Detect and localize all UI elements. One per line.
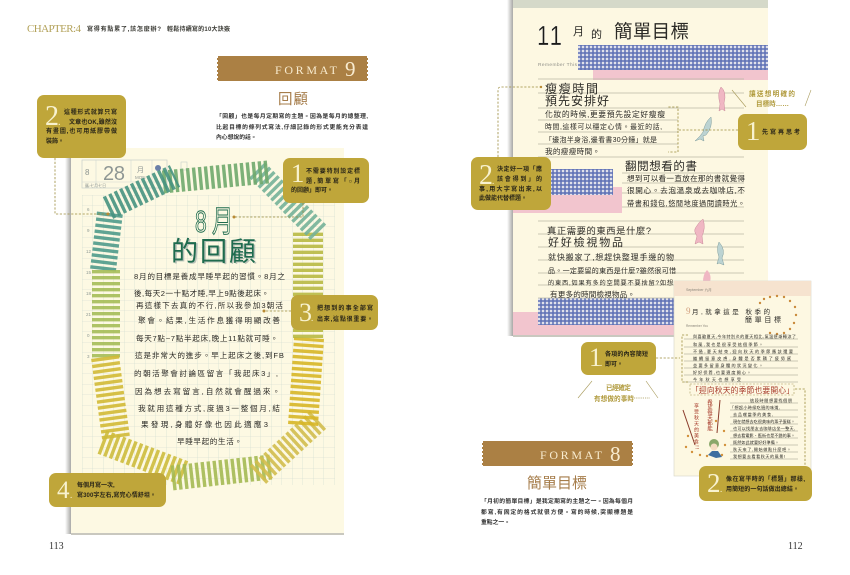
handwritten text: august review body: 果發現,身體好像也因此適應3: [141, 419, 268, 429]
handwritten section: books: 帶書和錢包,悠閒地度過閱讀時光。: [627, 199, 745, 208]
handwritten text: august review body: 8月的目標是養成早睡早起的習慣。8月之: [134, 271, 285, 281]
handwritten section: books: 翻閱想看的書: [625, 159, 697, 173]
chapter header: [27, 23, 230, 35]
intro text: review: 「回顧」也是每月定期寫的主題。因為是每月的總整理,: [216, 112, 368, 120]
heading: review: 回顧: [278, 91, 308, 108]
handwritten section: slimming time: 我的瘦瘦時間。: [545, 146, 600, 156]
note body: 不過,夏天結束,迎向秋天的季節應該還要: [693, 348, 793, 354]
callout 2: left page: 有畫圖,也可用紙膠帶做: [46, 127, 117, 135]
note second body: [730, 397, 798, 459]
hour scale: 18: [86, 291, 92, 296]
callout 1: right top: [738, 114, 807, 150]
note body: 並要多留意身體的狀況變化。: [693, 362, 763, 368]
hour scale: [86, 207, 92, 359]
ruled lines: [538, 79, 744, 298]
hour scale: 3: [87, 354, 90, 359]
callout 1: left page: 題,簡單寫「○月: [306, 177, 360, 185]
callout 3: left page: 出來,這點很重要。: [317, 315, 373, 323]
handwritten section: things: 的東西,如果有多的空間要不要捨留?如想: [548, 279, 673, 287]
callout 1: center: 即可。: [605, 361, 623, 368]
callout 2: right left: 決定好一項「應: [497, 165, 542, 173]
callout 1: right top: .: [757, 132, 759, 142]
intro text: review: [216, 112, 368, 141]
handwritten text: august review body: 後,每天2一十點才睡,早上9點後起床。: [134, 288, 269, 298]
side note: when setting a clear goal: 目標時……: [756, 99, 789, 108]
callout 2: right left: 該會得到」的: [497, 175, 542, 183]
red heading in note: 「迎向秋天的季節也要開心」: [691, 385, 794, 395]
note body: 今年秋天也想享受: [693, 376, 741, 382]
small note: september goals: [674, 281, 811, 476]
handwritten text: august review body: 這是非常大的進步。早上起床之後,到FB: [135, 350, 284, 360]
handwritten text: august review body: 早睡早起的生活。: [177, 436, 242, 446]
note body: 與喜歡夏天,今年特別炎的夏天相比,氣溫逐漸轉涼了: [693, 333, 796, 339]
icon: fish: [695, 87, 725, 282]
note second body: 也可以找朋友去咖啡店坐一整天,: [733, 425, 795, 431]
handwritten section: things: [547, 225, 676, 299]
date header box: 8: [85, 168, 90, 177]
small note: september goals: September 九月: [686, 287, 712, 292]
handwritten section: books: 想到可以看一直放在那的書就覺得: [627, 173, 745, 183]
banner: format 9: FORMAT: [275, 63, 340, 77]
date header box: 舊:七月七日: [85, 182, 106, 188]
handwritten text: august review body: 再這樣下去真的不行,所以我參加3朝活: [136, 300, 283, 310]
callout 3: left page: [291, 295, 378, 330]
note second body: 我想要去看看秋天的風景!: [733, 453, 785, 459]
handwritten section: slimming time: 時間,這樣可以穩定心情。最近的話,: [545, 122, 662, 131]
chapter header: 輕鬆持續寫的10大訣竅: [167, 25, 230, 33]
handwritten text: august review body: 我就用這種方式,度過3一整個月,結: [138, 403, 280, 413]
callout 2: right left: .: [492, 176, 494, 186]
connector: callout 1 to body bracket: [668, 107, 738, 152]
note second body: 去品嚐當季的美食,: [733, 411, 773, 417]
callout 2: bottom right: 像在寫平時的「標題」那樣,: [726, 475, 805, 483]
connector: callout 2 to heading: [498, 86, 542, 157]
intro text: simple goals: 都寫,有固定的格式就很方便。寫的時候,突顯標題是: [481, 508, 633, 516]
intro text: review: 比起目標的條列式寫法,仔細記錄的形式更能充分表達: [216, 123, 368, 131]
note body: 好好保養,也要適度開心。: [693, 369, 751, 375]
callout 1: right top: 先寫再思考: [762, 128, 800, 136]
handwritten title: november goals: 月: [573, 26, 584, 38]
callout 1: center: 各項的內容簡短: [605, 350, 648, 358]
note second body: 這段時間想要找個朋: [750, 397, 792, 403]
side note: when setting a clear goal: [732, 89, 811, 108]
hour scale: 0: [87, 333, 90, 338]
handwritten section: books: [625, 159, 745, 208]
panel: notebook page august review: [65, 148, 344, 535]
note body: [682, 333, 798, 382]
intro text: simple goals: 「月初的簡單目標」是我定期寫的主題之一。因為每個月: [481, 497, 633, 505]
hour scale: 6: [87, 207, 90, 212]
handwritten title: august review: [171, 204, 258, 268]
handwritten section: things: 真正需要的東西是什麼?: [547, 225, 651, 236]
handwritten text: august review body: 聚會。結果,生活作息獲得明顯改善: [138, 315, 280, 325]
handwritten section: slimming time: 預先安排好: [545, 93, 609, 108]
connector: callout 2 to tape: [55, 158, 110, 216]
date header box: 28: [103, 163, 125, 185]
side note: already decided: 有想做的事時: [594, 394, 634, 403]
dotted sun circle: [759, 295, 797, 335]
callout 2: right left: [471, 157, 551, 210]
washi tape ring: [102, 170, 320, 478]
intro text: simple goals: 重點之一。: [481, 518, 510, 526]
handwritten title: november goals: [537, 21, 689, 68]
callout 1: left page: 不需要特別設定標: [306, 167, 360, 175]
note title: Remember You: [686, 324, 708, 328]
callout 2: left page: .: [58, 117, 60, 128]
callout 1: center: 1: [589, 343, 602, 372]
callout 2: left page: 2: [45, 101, 59, 132]
callout 1: center: [581, 342, 656, 375]
hour scale: 12: [86, 249, 92, 254]
handwritten title: august review: 的回顧: [171, 237, 256, 267]
callout 1: left page: 1: [291, 159, 304, 188]
handwritten title: november goals: 的: [591, 27, 602, 41]
callout 2: bottom right: 用簡短的一句話做出總結。: [726, 485, 799, 493]
callout 2: left page: 這種形式就算只寫: [64, 108, 117, 116]
callout 2: right left: 事,用大字寫出來,以: [479, 185, 542, 193]
chapter header: 寫得有點累了,該怎麼辦?: [87, 25, 161, 33]
page number 112: 112: [788, 541, 803, 552]
side note: when setting a clear goal: 讓送想明確的: [749, 89, 795, 98]
banner: format 8: 8: [610, 442, 620, 466]
page number 113: 113: [49, 541, 64, 552]
banner: format 9: [217, 56, 368, 81]
callout 2: bottom right: 2: [707, 468, 720, 498]
handwritten text: august review body: 的朝活聚會討論區留言「我起床3」,: [134, 368, 278, 378]
intro text: simple goals: [481, 497, 633, 526]
intro text: review: 內心想說的話。: [216, 133, 257, 141]
callout 2: left page: [37, 95, 126, 158]
callout 3: left page: .: [311, 313, 313, 323]
connector: callout 1 to title: [232, 203, 303, 218]
side note: already decided: 已經確定: [606, 383, 631, 392]
callout 3: left page: 3: [299, 298, 312, 327]
hour scale: 9: [87, 228, 90, 233]
handwritten text: august review body: 每天7點~7點半起床,晚上11點就可睡。: [136, 333, 278, 343]
callout 1: left page: 的回顧」即可。: [291, 186, 333, 194]
panel: notebook page november goals: [507, 0, 768, 337]
connector: callout 2 to red heading: [795, 389, 805, 466]
note second body: 既然如此就要好好準備。: [733, 439, 779, 445]
red vertical text and character: [683, 398, 726, 458]
handwritten section: slimming time: 「邊泡半身浴,邊看書30分鐘」就是: [545, 135, 657, 144]
note title: 月,就拿這是 秋季的: [692, 307, 770, 316]
red vertical text and character: 享受秋天的美食!!: [693, 402, 699, 449]
connector: callout 3 to body: [262, 310, 291, 312]
handwritten section: things: 就快搬家了,想趕快整理手邊的物: [548, 252, 674, 262]
hour scale: 21: [86, 312, 92, 317]
handwritten section: things: 好好檢視物品: [548, 235, 623, 249]
callout 1: left page: [283, 158, 369, 203]
callout 2: right left: 此做能代替標題。: [479, 194, 527, 202]
date header box: [82, 160, 187, 188]
note body: 和風,我也是很享受這個季節。: [693, 341, 763, 347]
callout 4: left page: 4: [57, 477, 70, 504]
callout 1: left page: .: [301, 174, 303, 184]
banner: format 9: 9: [345, 57, 356, 81]
callout 2: right left: 2: [479, 160, 493, 191]
handwritten section: books: 很開心。去泡溫泉或去咖啡店,不: [627, 185, 745, 195]
note second body: 現在就想去吃很美味的栗子蛋糕。: [733, 418, 795, 424]
handwritten title: november goals: 簡單目標: [614, 21, 689, 42]
chapter header: CHAPTER:4: [27, 23, 82, 35]
handwritten title: august review: 的回顧: [172, 238, 258, 268]
date header box: 月: [137, 166, 144, 174]
side note: already decided: [578, 381, 658, 403]
note second body: 秋天來了,開始做點什麼吧。: [733, 446, 791, 452]
handwritten section: things: 品。一定要留的東西是什麼?雖然很可惜: [548, 266, 676, 275]
handwritten section: slimming time: 瘦瘦時間: [545, 81, 598, 96]
callout 2: left page: 裝飾。: [46, 137, 64, 145]
callout 3: left page: 把想到的事全部寫: [317, 304, 373, 312]
callout 4: left page: 每個月寫一次,: [77, 481, 115, 489]
callout 2: left page: 文章也OK,雖然沒: [69, 118, 117, 126]
handwritten section: slimming time: 化妝的時候,更要預先設定好瘦瘦: [545, 109, 665, 119]
handwritten text: august review body: 因為想去寫留言,自然就會醒過來。: [135, 386, 280, 396]
note title: 簡單目標: [745, 315, 781, 324]
handwritten title: august review: 8月: [195, 204, 233, 239]
handwritten text: august review body: [134, 271, 285, 446]
banner: format 8: [482, 441, 633, 466]
heading: simple goals: 簡單目標: [527, 474, 587, 492]
pink and blue gingham tapes: [513, 45, 768, 335]
callout 1: right top: 1: [746, 116, 760, 146]
callout 2: bottom right: [699, 466, 812, 501]
hour scale: 15: [86, 270, 92, 275]
handwritten title: november goals: 11: [537, 21, 562, 52]
handwritten section: things: 有更多的時間檢視物品。: [550, 289, 635, 299]
note second body: 想去看電影、逛街也是不錯的事。: [733, 432, 795, 438]
callout 4: left page: [49, 473, 166, 507]
callout 2: bottom right: .: [720, 484, 722, 494]
handwritten title: november goals: Remember This: [538, 62, 578, 68]
banner: format 8: FORMAT: [540, 448, 605, 462]
callout 4: left page: .: [70, 490, 72, 500]
callout 4: left page: 寫300字左右,寫完心情舒坦。: [77, 491, 156, 499]
connector: callout 1 center to note: [656, 357, 680, 359]
callout 1: center: .: [600, 358, 602, 368]
note second body: 「想起小時候吃過的味道,: [730, 404, 780, 410]
note body: 繼續留意皮膚,身體是否累積了疲勞感: [693, 355, 791, 361]
red vertical text and character: 希望每天都能: [706, 398, 713, 432]
date header box: MON: [135, 175, 146, 180]
note title: 9: [686, 306, 691, 316]
note title: [686, 306, 781, 328]
handwritten section: slimming time: [545, 81, 665, 156]
